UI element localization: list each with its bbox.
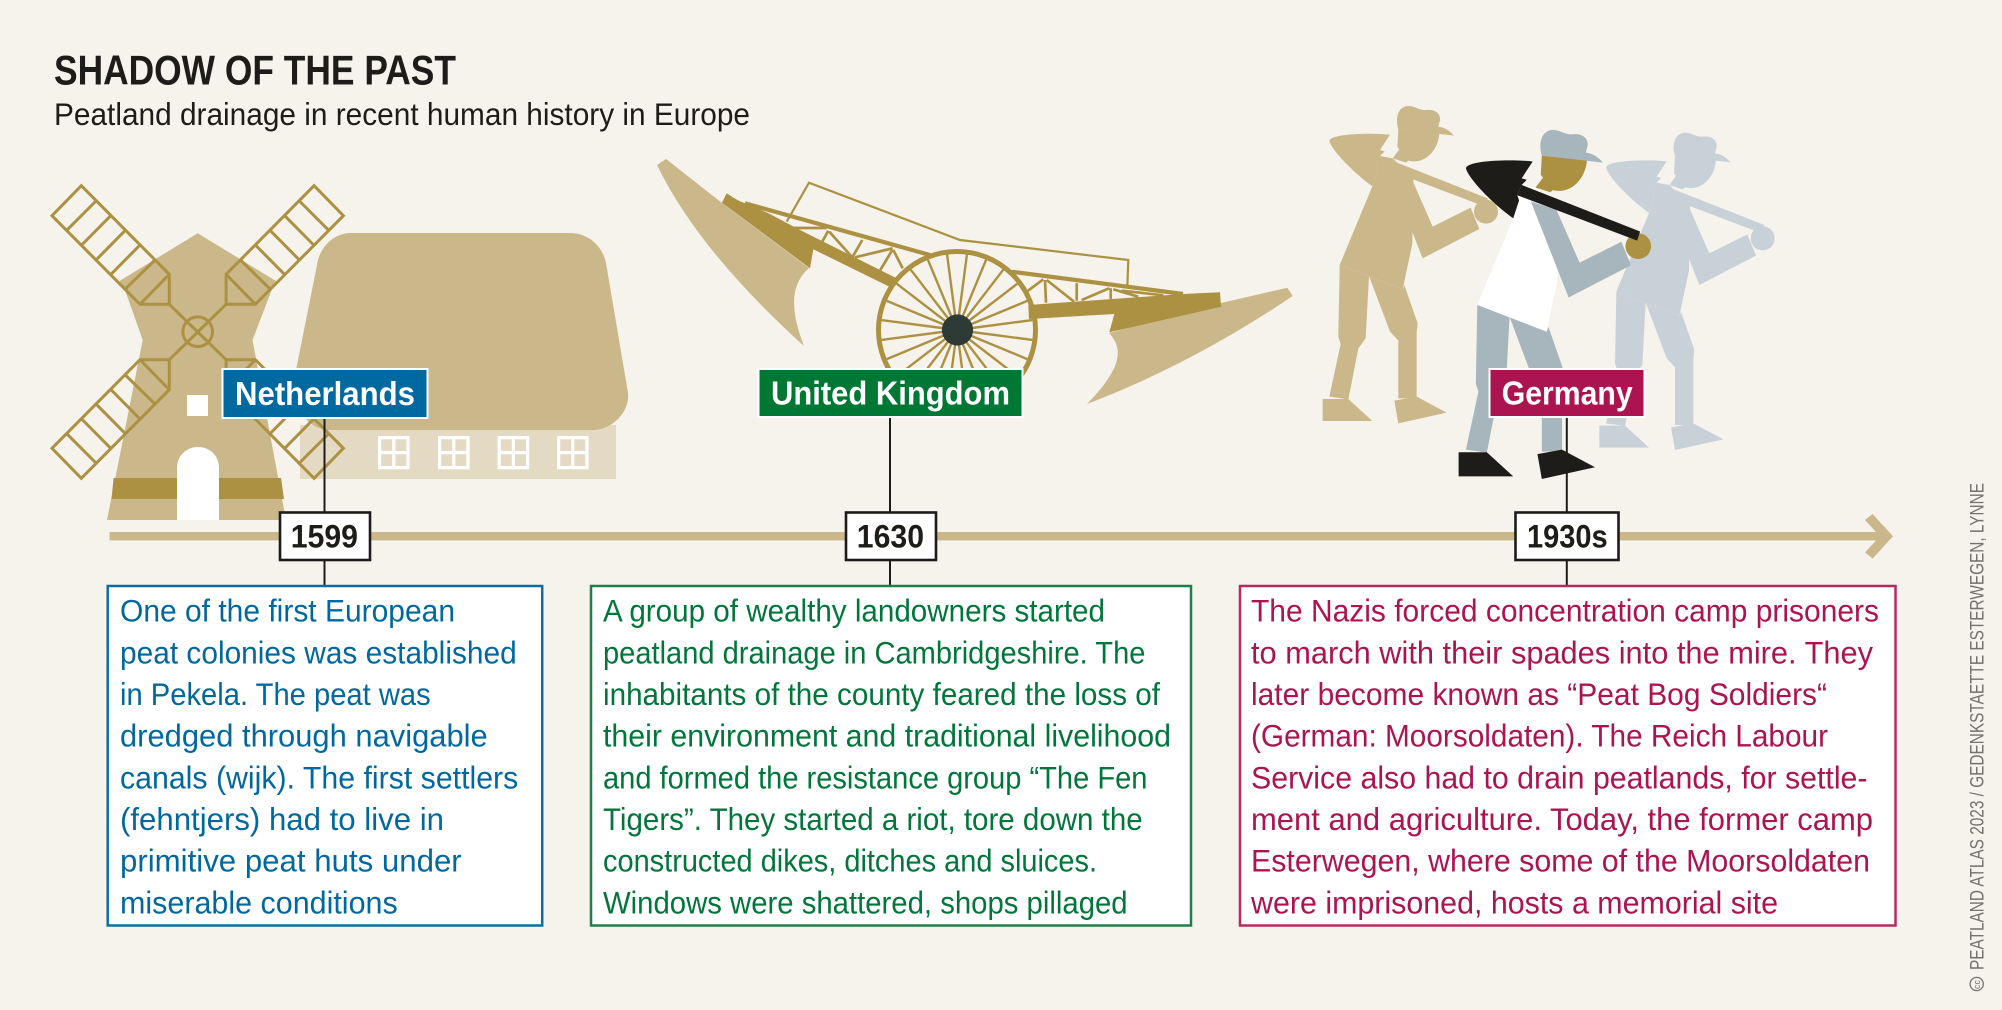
credit line: cc <box>1972 980 1983 989</box>
year: 1930s <box>1516 512 1618 560</box>
connector: United Kingdom <box>889 418 891 586</box>
year: 1630 <box>846 512 936 560</box>
text box: Netherlands: One of the first European <box>120 593 455 629</box>
year: 1599: 1599 <box>291 519 358 555</box>
icon: front worker with spade <box>1459 130 1651 479</box>
text box: United Kingdom <box>591 586 1191 926</box>
subtitle: Peatland drainage in recent human history in Europe <box>54 96 750 132</box>
label: United Kingdom: United Kingdom <box>771 374 1010 412</box>
icon: tan worker silhouette <box>1323 106 1498 423</box>
text box: Netherlands: peat colonies was established <box>120 634 517 670</box>
icon: windmill <box>52 186 343 520</box>
text box: Germany <box>1240 586 1896 926</box>
text box: Netherlands <box>108 586 542 926</box>
credit line: PEATLAND ATLAS 2023 / GEDENKSTAETTE ESTERWEGEN, LYNNE <box>1966 483 1988 970</box>
icon: plough <box>657 159 1293 408</box>
text box: Germany: Esterwegen, where some of the Moorsoldaten <box>1251 843 1870 879</box>
timeline arrow <box>110 514 1893 559</box>
text box: United Kingdom: A group of wealthy landowners started <box>603 593 1105 629</box>
label: Germany: Germany <box>1502 374 1633 412</box>
text box: Germany: Service also had to drain peatlands, for settle- <box>1251 759 1868 795</box>
text box: Germany: later become known as “Peat Bog Soldiers“ <box>1251 676 1827 712</box>
year: 1630: 1630 <box>857 519 924 555</box>
text box: Germany: were imprisoned, hosts a memorial site <box>1250 884 1778 920</box>
year: 1930s: 1930s <box>1527 519 1608 555</box>
text box: Netherlands: in Pekela. The peat was <box>120 676 431 712</box>
connector: Germany <box>1566 418 1568 586</box>
text box: Netherlands: dredged through navigable <box>120 718 488 754</box>
text box: Netherlands: primitive peat huts under <box>120 843 462 879</box>
text box: United Kingdom: peatland drainage in Cambridgeshire. The <box>603 634 1145 670</box>
text box: United Kingdom: and formed the resistance group “The Fen <box>603 759 1147 795</box>
title: SHADOW OF THE PAST <box>54 46 456 93</box>
text box: Netherlands: miserable conditions <box>120 884 398 920</box>
icon: farmhouse <box>294 233 628 479</box>
text box: Germany: ment and agriculture. Today, the former camp <box>1251 801 1873 837</box>
text box: Germany: The Nazis forced concentration camp prisoners <box>1251 593 1879 629</box>
text box: Germany: to march with their spades into the mire. They <box>1251 634 1873 670</box>
connector: Netherlands <box>324 418 326 586</box>
text box: United Kingdom: constructed dikes, ditches and sluices. <box>603 843 1097 879</box>
text box: Netherlands: (fehntjers) had to live in <box>120 801 444 837</box>
text box: United Kingdom: inhabitants of the county feared the loss of <box>603 676 1160 712</box>
label: Netherlands: Netherlands <box>235 375 415 412</box>
text box: Germany: (German: Moorsoldaten). The Reich Labour <box>1251 718 1828 754</box>
text box: United Kingdom: their environment and traditional livelihood <box>603 718 1171 754</box>
text box: United Kingdom: Tigers”. They started a riot, tore down the <box>603 801 1143 837</box>
icon: pale worker silhouette <box>1599 133 1775 450</box>
text box: United Kingdom: Windows were shattered, shops pillaged <box>603 884 1128 920</box>
year: 1599 <box>280 512 370 560</box>
text box: Netherlands: canals (wijk). The first settlers <box>120 759 518 795</box>
